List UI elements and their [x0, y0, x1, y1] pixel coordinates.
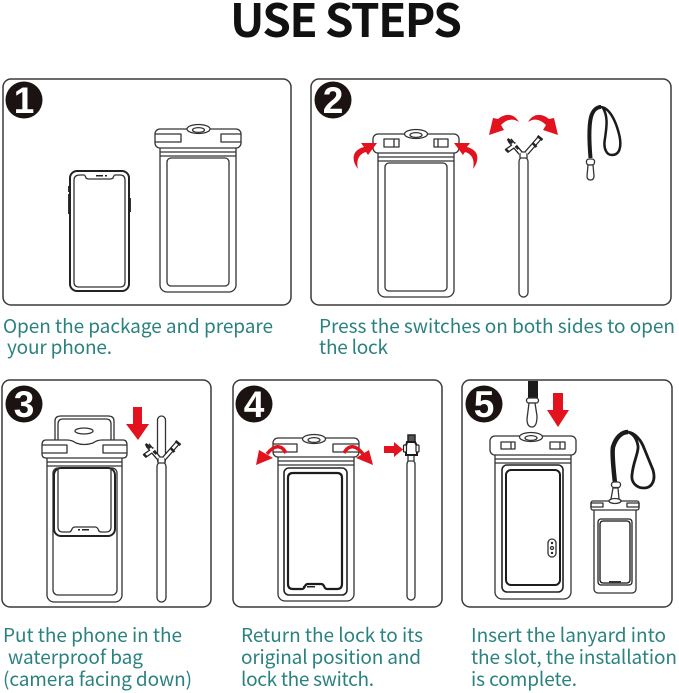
panel: step 1 prepare phone	[3, 79, 291, 305]
caption: step 3: (camera facing down)	[3, 665, 192, 692]
badge: step 2	[314, 80, 352, 121]
badge: step 4	[236, 384, 272, 425]
badge: step 4: 4	[244, 384, 265, 425]
arrow: left switch	[354, 143, 377, 169]
caption: step 3: Put the phone in the	[3, 621, 182, 648]
badge: step 3	[6, 384, 42, 425]
caption: step 4: Return the lock to its	[241, 621, 423, 648]
badge: step 2: 2	[323, 80, 343, 121]
icon: lanyard	[586, 107, 620, 180]
caption: step 3: waterproof bag	[8, 643, 143, 670]
icon: waterproof bag	[373, 130, 459, 297]
panel: step 3 insert phone	[2, 380, 211, 607]
icon: phone entering bag	[42, 416, 127, 602]
icon: bag side view	[506, 136, 542, 297]
caption: step 5: Insert the lanyard into	[471, 621, 666, 648]
caption: step 1: Open the package and prepare	[3, 312, 273, 339]
arrow: close left	[256, 447, 286, 465]
caption: step 5: the slot, the installation	[471, 643, 677, 670]
icon: phone	[68, 171, 131, 291]
icon: sealed bag	[273, 434, 359, 601]
icon: bag side view	[144, 416, 180, 602]
caption: step 2: Press the switches on both sides to open	[319, 312, 675, 339]
caption: step 2: the lock	[319, 333, 388, 360]
arrow: right switch	[454, 143, 477, 169]
icon: bag with float panel	[490, 432, 576, 599]
icon: bag side view locked	[404, 435, 419, 600]
panel: step 2 open switches	[311, 79, 671, 305]
caption: step 5: is complete.	[471, 665, 577, 692]
caption: step 1: your phone.	[7, 333, 112, 360]
icon: lanyard and hook	[526, 381, 538, 427]
badge: step 1: 1	[14, 80, 34, 121]
arrow: close right	[344, 447, 373, 465]
badge: step 5: 5	[474, 384, 494, 425]
panel: step 4 lock	[233, 380, 442, 607]
icon: waterproof bag	[155, 124, 241, 292]
badge: step 1	[6, 80, 42, 121]
arrow: open right	[528, 115, 558, 135]
arrow: insert down	[126, 407, 149, 440]
panel: step 5 attach lanyard	[462, 380, 672, 607]
arrow: lanyard down	[547, 393, 569, 427]
arrow: press lock	[384, 442, 403, 457]
caption: step 4: original position and	[241, 643, 421, 670]
badge: step 5	[466, 384, 502, 425]
badge: step 3: 3	[14, 384, 34, 425]
arrow: open left	[489, 115, 519, 135]
caption: step 4: lock the switch.	[241, 665, 374, 692]
icon: assembled mini bag with lanyard	[591, 432, 654, 593]
